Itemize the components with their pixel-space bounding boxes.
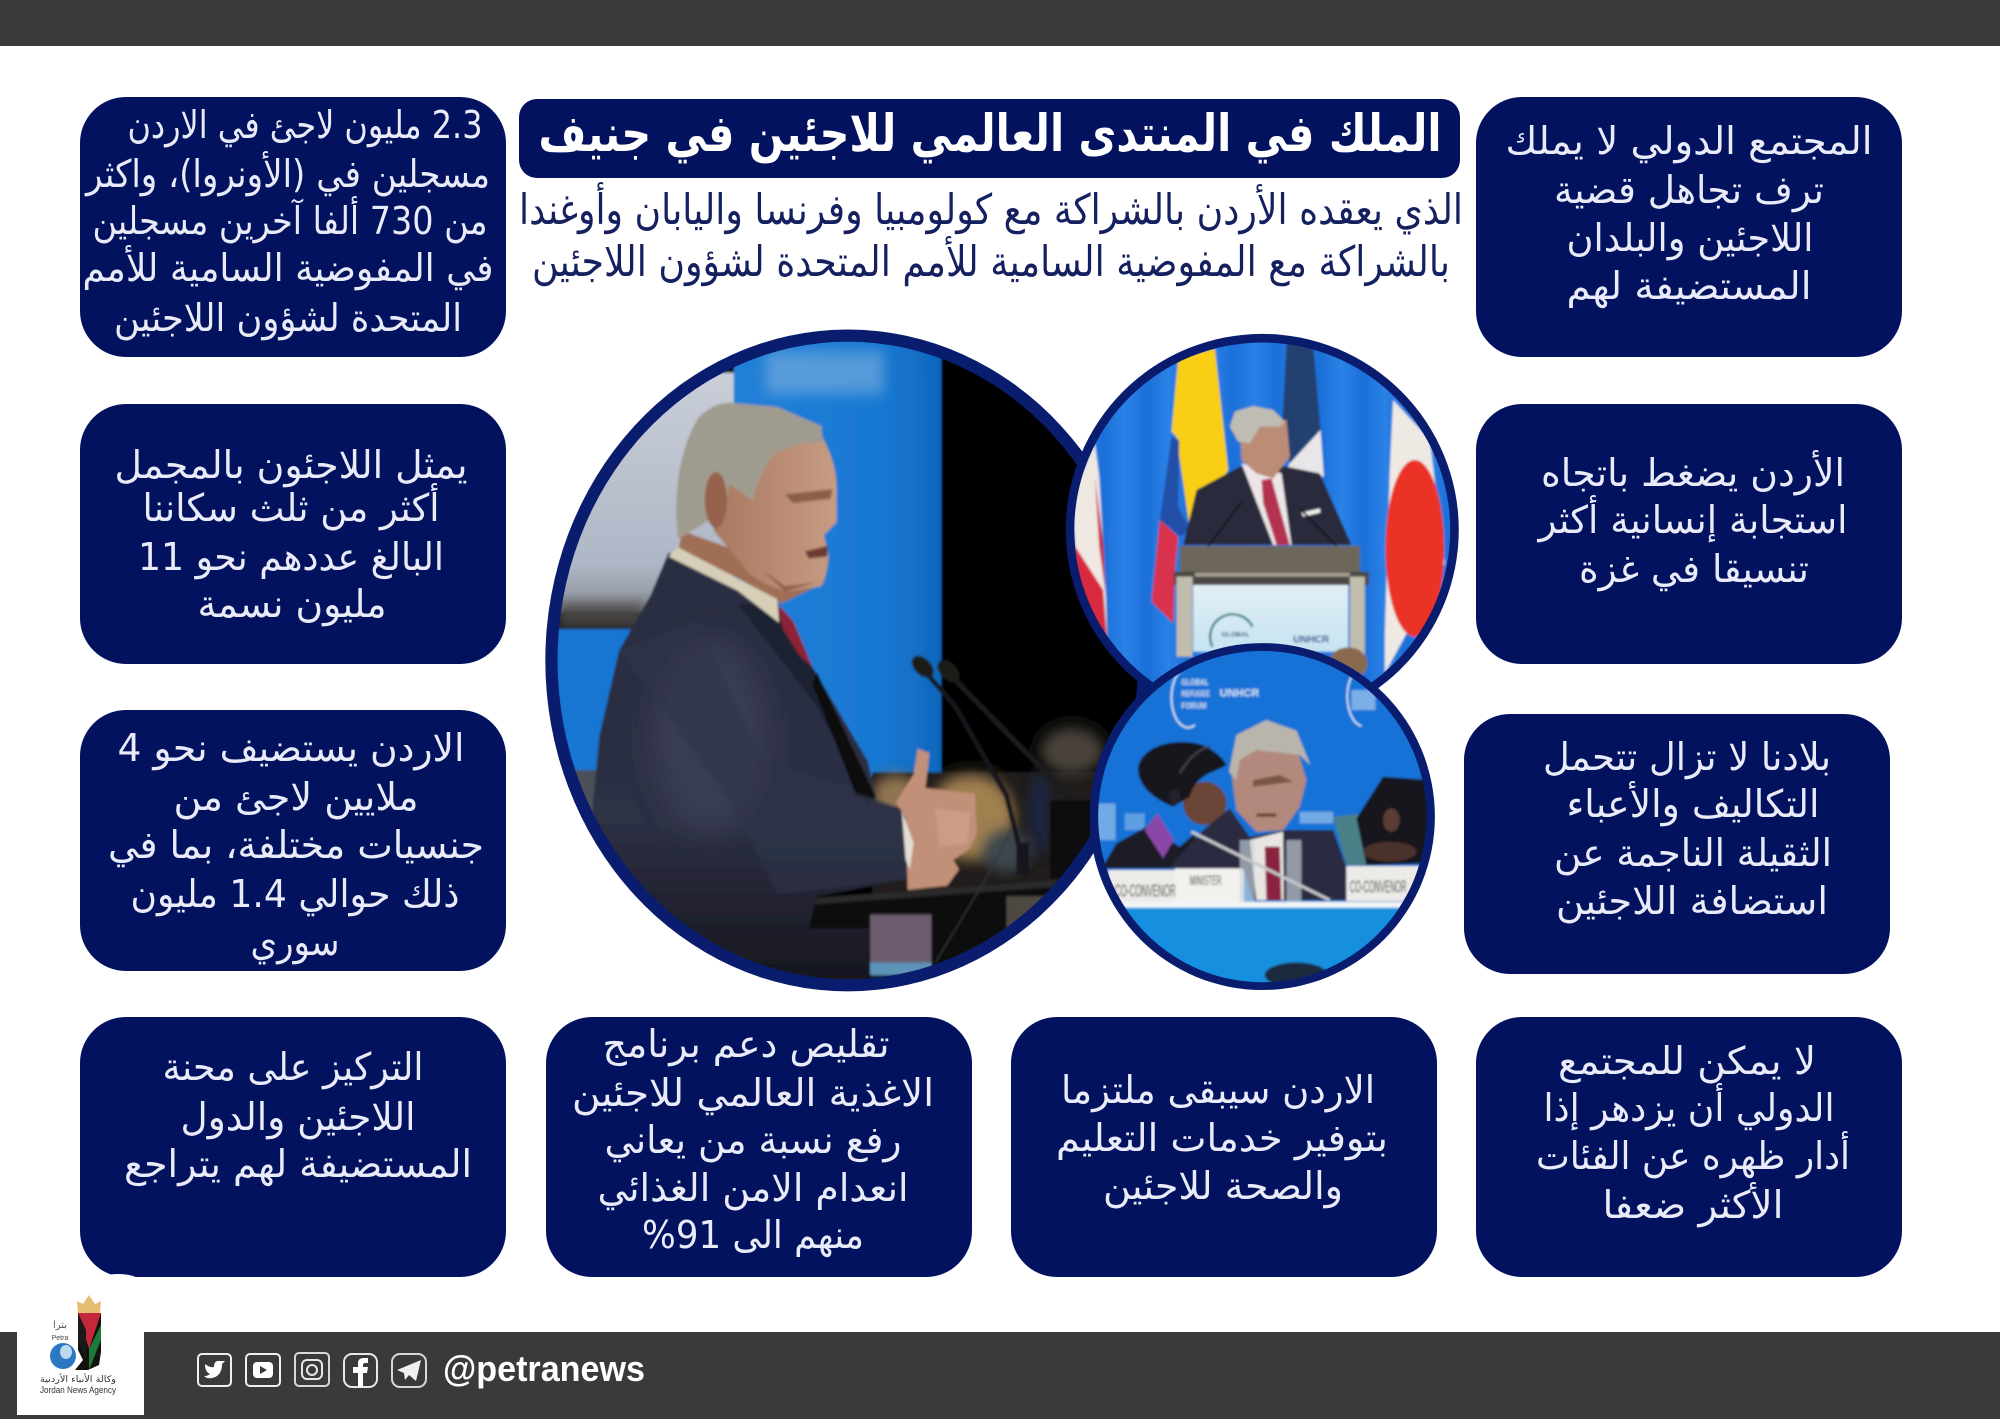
handle: @petranews [443, 1348, 645, 1389]
icon: youtube [246, 1354, 280, 1386]
panel: Jordan committed to education and health: بتوفير خدمات التعليم [1056, 1116, 1388, 1161]
corner notch above logo [98, 1274, 138, 1286]
icon: facebook [344, 1354, 377, 1387]
photo: King seated at convenors table: MINISTER [1190, 874, 1222, 889]
panel: Jordan committed to education and health: والصحة للاجئين [1103, 1164, 1343, 1209]
lectern [1180, 546, 1360, 574]
panel: community cannot prosper: أدار ظهره عن الفئات [1536, 1131, 1850, 1179]
logo: Petra Jordan News Agency: بترا [53, 1320, 67, 1331]
panel: heavy burdens of hosting [1464, 714, 1890, 974]
title banner: الملك في المنتدى العالمي للاجئين في جنيف [538, 105, 1442, 164]
forum logos [1171, 670, 1195, 728]
panel: international community cannot ignore: المجتمع الدولي لا يملك [1506, 119, 1872, 164]
head [712, 437, 839, 592]
panel: WFP support cuts [546, 1017, 972, 1277]
podium [810, 887, 1052, 978]
panel: refugees share of population: البالغ عددهم نحو 11 [138, 535, 444, 580]
panel: UNRWA and UNHCR registered refugees: المتحدة لشؤون اللاجئين [114, 296, 462, 341]
panel: focus on refugees receding: التركيز على محنة [162, 1045, 424, 1090]
panel: heavy burdens of hosting: استضافة اللاجئين [1556, 879, 1828, 924]
icon: instagram [295, 1353, 329, 1386]
suit [591, 552, 908, 1000]
panel: international community cannot ignore: المستضيفة لهم [1566, 264, 1812, 309]
panel: community cannot prosper: لا يمكن للمجتمع [1558, 1039, 1816, 1084]
panel: UNRWA and UNHCR registered refugees: من 730 ألفا آخرين مسجلين [92, 196, 488, 244]
subtitle [519, 182, 1463, 287]
icon: telegram [392, 1354, 426, 1387]
panel: community cannot prosper: الأكثر ضعفا [1602, 1181, 1784, 1228]
panel: Jordan pushes for Gaza response [1476, 404, 1902, 664]
panel: WFP support cuts: منهم الى 91% [642, 1213, 864, 1258]
panel: heavy burdens of hosting: الثقيلة الناجمة عن [1554, 831, 1832, 876]
subtitle: بالشراكة مع المفوضية السامية للأمم المتحدة لشؤون اللاجئين [532, 235, 1450, 287]
panel: refugees share of population: مليون نسمة [198, 582, 386, 627]
panel: focus on refugees receding: اللاجئين والدول [180, 1095, 416, 1140]
panel: UNRWA and UNHCR registered refugees: في المفوضية السامية للأمم [82, 244, 494, 291]
panel: refugees share of population: أكثر من ثلث سكاننا [142, 483, 440, 531]
man at centre [1168, 808, 1346, 900]
panel: Jordan hosts 4 million refugees: الاردن يستضيف نحو 4 [118, 726, 465, 771]
water glasses and mic [1240, 840, 1255, 902]
panel: Jordan hosts 4 million refugees: ملايين لاجئ من [174, 775, 418, 820]
panel: WFP support cuts: رفع نسبة من يعاني [604, 1118, 902, 1163]
panel: Jordan committed to education and health: الاردن سيبقى ملتزما [1061, 1068, 1375, 1113]
panel: international community cannot ignore [1476, 97, 1902, 357]
logo: Petra Jordan News Agency: Jordan News Agency [40, 1385, 116, 1395]
panel: international community cannot ignore: ترف تجاهل قضية [1554, 168, 1824, 213]
panel: WFP support cuts: تقليص دعم برنامج [602, 1022, 890, 1067]
photo: King seated at convenors table [1080, 640, 1440, 997]
panel: refugees share of population [80, 404, 506, 664]
panel: focus on refugees receding: المستضيفة لهم يتراجع [124, 1142, 472, 1187]
panel: UNRWA and UNHCR registered refugees [80, 97, 506, 357]
photo: King at UNHCR podium with flags: GLOBAL [1222, 632, 1250, 639]
panel: community cannot prosper: الدولي أن يزدهر إذا [1544, 1083, 1834, 1131]
panel: community cannot prosper [1476, 1017, 1902, 1277]
panel: heavy burdens of hosting: بلادنا لا تزال تتحمل [1543, 735, 1831, 780]
panel: Jordan hosts 4 million refugees: ذلك حوالي 1.4 مليون [130, 872, 460, 917]
person at right [1333, 813, 1370, 865]
hands [896, 749, 977, 890]
panel: Jordan pushes for Gaza response: الأردن يضغط باتجاه [1541, 449, 1845, 495]
panel: heavy burdens of hosting: التكاليف والأعباء [1566, 780, 1820, 827]
photo: King seated at convenors table: CO-CONVENOR [1115, 881, 1176, 901]
logo: Petra Jordan News Agency: وكالة الأنباء الأردنية [40, 1373, 116, 1385]
photo: King seated at convenors table: FORUM [1181, 701, 1207, 710]
microphones [926, 674, 1021, 845]
panel: Jordan hosts 4 million refugees: سوري [250, 920, 340, 965]
photo: King speaking at lectern [540, 330, 1160, 1000]
panel: Jordan pushes for Gaza response: استجابة إنسانية أكثر [1537, 495, 1848, 543]
panel: Jordan hosts 4 million refugees [80, 710, 506, 971]
top bar [0, 0, 2000, 46]
speaker [1183, 467, 1351, 545]
photo: King at UNHCR podium with flags: UNHCR [1293, 635, 1329, 646]
panel: UNRWA and UNHCR registered refugees: مسجلين في (الأونروا)، واكثر [84, 150, 490, 197]
logo: Petra Jordan News Agency: Petra [52, 1335, 68, 1342]
panel: international community cannot ignore: اللاجئين والبلدان [1566, 216, 1814, 261]
panel: Jordan pushes for Gaza response: تنسيقا في غزة [1579, 547, 1809, 592]
photo collage [545, 330, 1459, 992]
photo: King seated at convenors table: REFUGEE [1181, 690, 1210, 699]
icon: twitter [198, 1354, 231, 1386]
subtitle: الذي يعقده الأردن بالشراكة مع كولومبيا وفرنسا واليابان وأوغندا [519, 182, 1463, 235]
flags [1172, 348, 1228, 530]
neck and collar [678, 531, 825, 604]
photo: King seated at convenors table: GLOBAL [1181, 678, 1209, 687]
woman at left [1101, 827, 1201, 868]
logo: Petra Jordan News Agency [17, 1295, 144, 1415]
panel: WFP support cuts: الاغذية العالمي للاجئين [572, 1071, 934, 1116]
footer bar [0, 1332, 2000, 1419]
name plates [1108, 870, 1244, 905]
panel: Jordan hosts 4 million refugees: جنسيات مختلفة، بما في [108, 823, 484, 867]
photo: King seated at convenors table: CO-CONVENOR [1350, 877, 1407, 896]
panel: focus on refugees receding [80, 1017, 506, 1277]
panel: refugees share of population: يمثل اللاجئون بالمجمل [114, 443, 468, 488]
photo: King seated at convenors table: UNHCR [1220, 688, 1259, 700]
panel: WFP support cuts: انعدام الامن الغذائي [598, 1166, 908, 1211]
photo: King at UNHCR podium with flags [1066, 334, 1459, 688]
title banner [519, 99, 1460, 178]
panel: Jordan committed to education and health [1011, 1017, 1437, 1277]
panel: UNRWA and UNHCR registered refugees: 2.3 مليون لاجئ في الاردن [128, 103, 482, 148]
